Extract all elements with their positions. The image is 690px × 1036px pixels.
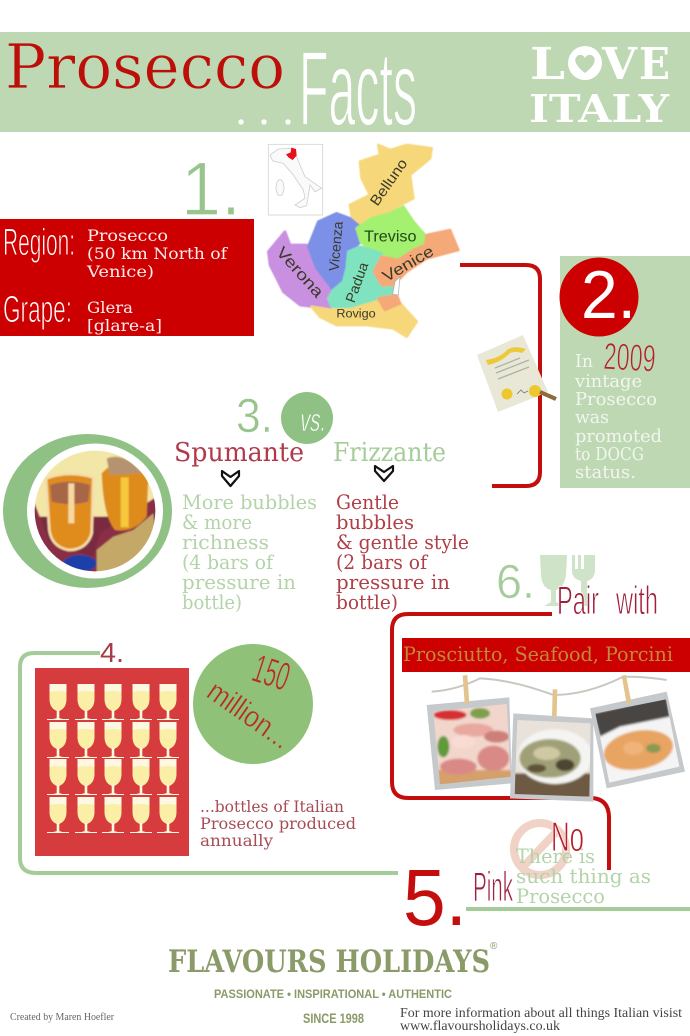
status text: status. — [575, 462, 636, 483]
heading: Frizzante: Frizzante — [333, 438, 446, 468]
badge: 150 million: 150 — [247, 647, 295, 700]
credit: Created by Maren Hoefler — [10, 1012, 115, 1023]
photo: porcini risotto — [510, 713, 593, 802]
icon: no sign — [514, 823, 566, 875]
icon: chevron right — [375, 466, 393, 481]
vs badge — [281, 392, 333, 444]
since: SINCE 1998 — [303, 1010, 364, 1026]
text: Frizzante description: Gentle — [336, 491, 399, 514]
photo: champagne glasses in ring — [3, 434, 172, 588]
icon: chevron left — [222, 471, 239, 486]
logo: Flavours Holidays: ® — [490, 941, 498, 952]
photo: prosciutto — [427, 697, 513, 790]
logo: Love Italy — [529, 39, 670, 131]
divider: section 5 line — [466, 907, 690, 911]
map of Veneto: Verona — [272, 244, 326, 301]
text: Frizzante description: & gentle style — [336, 531, 469, 554]
logo: Flavours Holidays: FLAVOURS HOLIDAYS — [168, 944, 490, 980]
status text: was — [575, 407, 609, 428]
banner: title: Facts — [299, 30, 417, 148]
text: Pink — [473, 863, 513, 910]
logo: Love Italy: V — [601, 39, 638, 90]
map of Veneto: Padua — [342, 260, 371, 305]
logo: Love Italy: E — [639, 39, 670, 90]
region text — [86, 226, 228, 335]
more information: www.flavoursholidays.co.uk — [400, 1019, 560, 1034]
inset map of Italy — [268, 144, 323, 215]
panel: DOCG status — [560, 256, 690, 488]
connector: green bracket — [20, 653, 398, 873]
title: Facts — [238, 30, 417, 148]
label: Grape: Grape: — [3, 289, 72, 331]
heading: Spumante: Spumante — [174, 438, 304, 468]
banner: title — [0, 30, 690, 148]
tagline: PASSIONATE • INSPIRATIONAL • AUTHENTIC — [214, 987, 452, 1001]
text: Frizzante description: bubbles — [336, 511, 414, 534]
pegs — [463, 675, 631, 717]
handwritten: Pair with: Pair — [557, 579, 599, 623]
handwritten year: 2009 — [603, 336, 657, 381]
text: Spumante description — [182, 491, 317, 614]
number 5: 5. — [403, 853, 467, 942]
connector: red bracket — [460, 265, 540, 486]
map of Veneto: Vicenza — [326, 220, 346, 272]
text: bottles produced — [200, 798, 356, 850]
status text: to DOCG — [575, 444, 644, 465]
text: Spumante description: bottle) — [182, 591, 242, 614]
text: Frizzante description: (2 bars of — [336, 551, 429, 574]
banner: food list: Prosciutto, Seafood, Porcini — [403, 643, 673, 666]
status text: Prosecco — [575, 389, 657, 410]
banner: food list — [402, 638, 690, 672]
map of Veneto: Belluno — [368, 156, 411, 209]
map of Veneto: Rovigo — [336, 306, 376, 320]
map of Veneto — [268, 145, 458, 337]
number 2 in red circle — [560, 257, 638, 336]
text: Spumante description: & more — [182, 511, 252, 534]
icon: certificate — [477, 335, 556, 412]
region text: Glera — [87, 298, 133, 317]
region text: Prosecco — [87, 226, 168, 245]
text: no pink prosecco: There is — [516, 845, 595, 868]
text: bottles produced: ...bottles of Italian — [200, 798, 344, 816]
map of Veneto: Venice — [380, 243, 437, 286]
logo: Flavours Holidays — [168, 941, 498, 1026]
status text: vintage — [574, 371, 642, 392]
icon: glass and fork — [540, 555, 595, 606]
text: bottles produced: Prosecco produced — [200, 815, 356, 833]
handwritten: Pair with: with — [615, 579, 658, 623]
number 3: 3. — [236, 390, 273, 443]
number 1: 1. — [181, 147, 241, 232]
text: Spumante description: richness — [182, 531, 269, 554]
number 6: 6. — [496, 556, 535, 609]
text: Frizzante description: bottle) — [336, 591, 398, 614]
text: bottles produced: annually — [200, 832, 273, 850]
status text — [574, 351, 662, 483]
text: Frizzante description — [336, 491, 469, 614]
number 4: 4. — [100, 637, 124, 668]
connector: red bracket pairing — [392, 614, 609, 870]
region text: (50 km North of — [87, 244, 228, 263]
region text: Venice) — [86, 262, 154, 281]
logo: Love Italy: L — [530, 39, 565, 90]
badge: 150 million — [193, 644, 313, 764]
panel: region and grape — [0, 219, 254, 336]
map of Veneto: Treviso — [364, 229, 416, 246]
text: Spumante description: (4 bars of — [182, 551, 275, 574]
more information: For more information about all things Italian visist — [400, 1006, 682, 1021]
text: Frizzante description: pressure in — [336, 571, 450, 594]
photo: seafood — [590, 692, 685, 788]
text: no pink prosecco: such thing as — [516, 865, 651, 888]
text: Spumante description: More bubbles — [182, 491, 317, 514]
title: Prosecco: Prosecco — [5, 30, 285, 103]
panel: grid of glasses — [35, 668, 189, 856]
handwritten: No: No — [551, 813, 584, 860]
badge: 150 million: million... — [201, 675, 297, 756]
number 2 in red circle: 2. — [581, 257, 636, 333]
text: no pink prosecco — [516, 845, 651, 908]
logo: Love Italy: ITALY — [529, 86, 670, 131]
vs badge: vs. — [298, 402, 329, 438]
status text: promoted — [575, 426, 662, 447]
photos on string — [427, 675, 685, 802]
region text: [glare-a] — [87, 316, 162, 335]
label: Region: Region: — [3, 222, 75, 264]
more information — [400, 1006, 682, 1034]
text: no pink prosecco: Prosecco — [516, 885, 605, 908]
status text: In — [575, 351, 593, 372]
text: Spumante description: pressure in — [182, 571, 296, 594]
